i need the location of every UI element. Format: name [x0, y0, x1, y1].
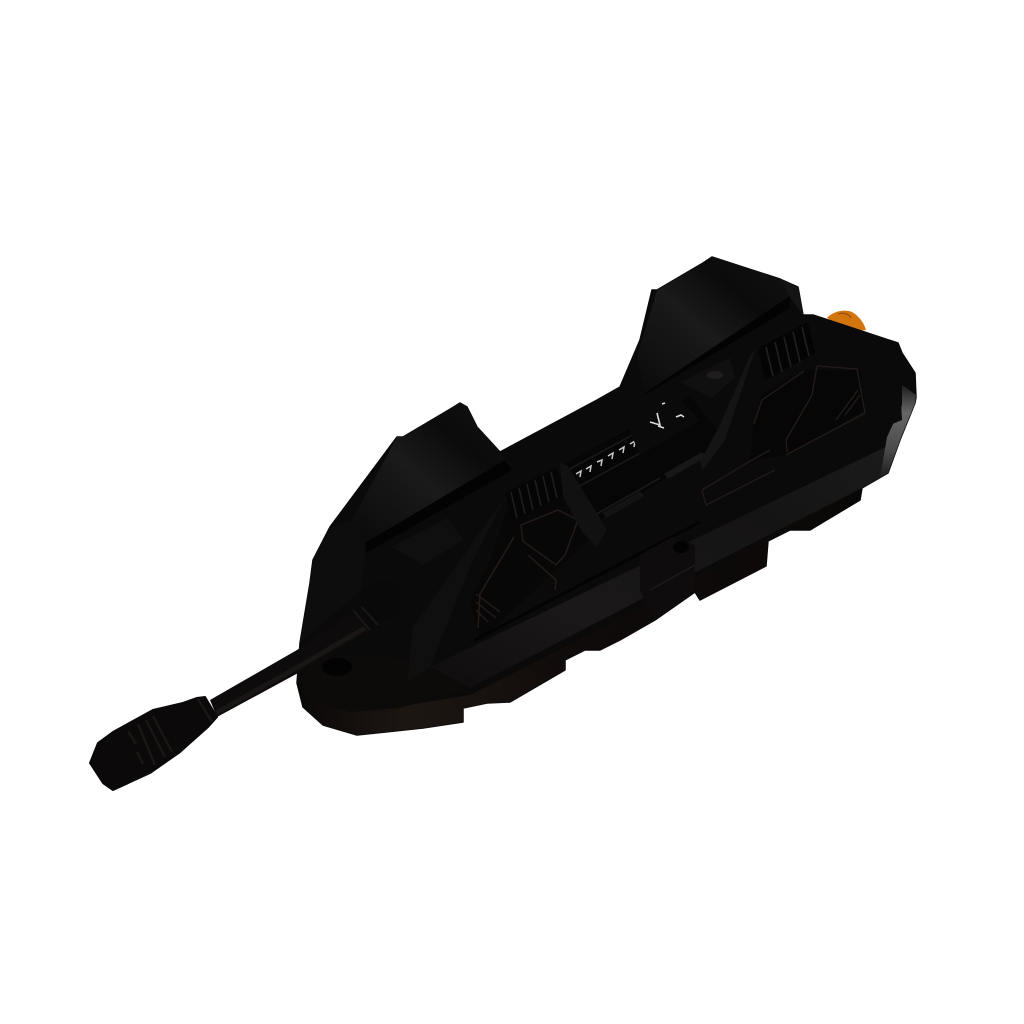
centre mounting boss [640, 537, 695, 620]
left tab [392, 518, 463, 565]
centre crossover strut right [700, 350, 755, 470]
white pin marks [576, 441, 635, 477]
connector [90, 697, 217, 790]
slot [365, 460, 512, 553]
hex outlines [476, 510, 578, 628]
centre bay rails [568, 420, 668, 515]
device body silhouette [297, 257, 916, 735]
right clip [637, 257, 803, 395]
centre tabs [664, 452, 706, 479]
orange knob [827, 311, 866, 332]
left ribbed grip [505, 467, 563, 522]
left clip [352, 403, 512, 553]
connector ribs [128, 699, 212, 765]
right ribbed grip [758, 322, 815, 380]
left plate sloped strut [407, 488, 510, 683]
centre crossover strut left [560, 463, 607, 547]
cable [210, 613, 370, 717]
cable and grommet [210, 580, 402, 717]
left base flange [297, 654, 470, 712]
centre bay [560, 388, 725, 520]
right end cap [880, 385, 916, 478]
mounting hole left [322, 658, 352, 676]
right clip upper strip [780, 279, 803, 315]
left recessed panel [470, 468, 700, 640]
front light band [430, 440, 900, 688]
right plate recess [702, 316, 902, 505]
base side shading [297, 488, 862, 735]
connector body [90, 697, 217, 790]
left shoulder [300, 520, 366, 643]
right tab [680, 358, 735, 398]
white contact marks [650, 403, 684, 428]
slot [645, 296, 790, 395]
